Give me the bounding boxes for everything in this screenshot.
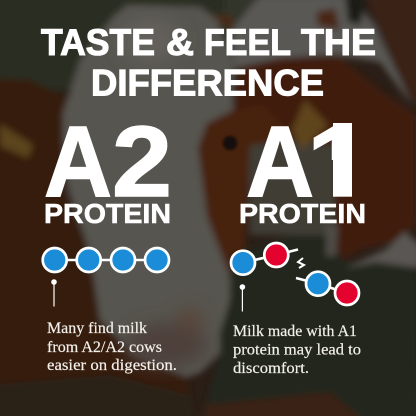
icon: A2 protein bead chain	[43, 248, 169, 272]
heading: A2 protein: A	[44, 106, 112, 218]
title	[41, 22, 376, 104]
title: DIFFERENCE	[91, 62, 324, 104]
cow eye	[223, 136, 237, 150]
icon: A1 protein broken chain	[231, 243, 359, 305]
heading: A1 protein	[240, 123, 364, 224]
heading: A2 protein	[44, 106, 172, 229]
pointer: A1 callout	[240, 284, 245, 312]
text: A1 description: protein may lead to	[233, 342, 361, 358]
title: THE	[301, 22, 376, 63]
heading: A1 protein: 1	[307, 106, 368, 218]
text: A2 description: Many find milk	[47, 320, 147, 337]
text: A2 description: easier on digestion.	[47, 357, 177, 374]
heading: A2 protein: PROTEIN	[44, 198, 171, 229]
title: &	[166, 22, 194, 63]
title: TASTE	[41, 22, 155, 63]
text: A1 description	[233, 323, 361, 377]
text: A1 description: discomfort.	[233, 360, 309, 377]
heading: A2 protein: 2	[112, 106, 172, 218]
nose shading	[120, 18, 207, 367]
text: A2 description	[47, 320, 177, 374]
heading: A1 protein: PROTEIN	[239, 198, 366, 229]
text: A2 description: from A2/A2 cows	[47, 339, 162, 356]
title: FEEL	[204, 22, 291, 63]
heading: A1 protein: A	[246, 106, 314, 218]
pointer: A2 callout	[51, 279, 57, 306]
text: A1 description: Milk made with A1	[233, 323, 357, 340]
